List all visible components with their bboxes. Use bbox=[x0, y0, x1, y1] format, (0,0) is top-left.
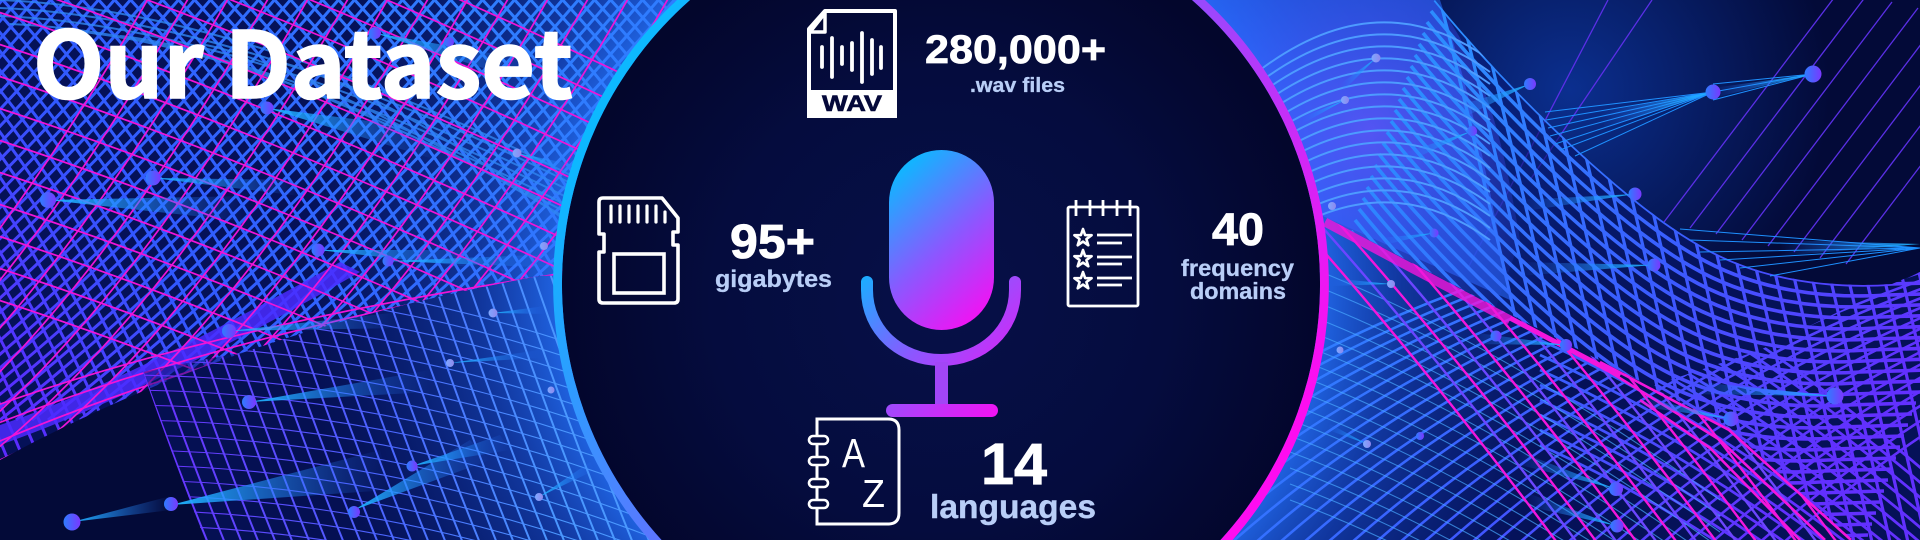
mesh: right side blue strands bbox=[1192, 0, 1920, 540]
stat: 14 languages: languages bbox=[930, 488, 1096, 525]
icon: A-Z address book: Z bbox=[862, 473, 885, 516]
stat: 40 frequency domains: domains bbox=[1190, 278, 1286, 304]
mesh: right pink band bbox=[1314, 216, 1852, 540]
spikes and nodes, left bbox=[40, 27, 595, 530]
stat: 14 languages bbox=[930, 432, 1096, 525]
stat: 95+ gigabytes: 95+ bbox=[730, 216, 815, 269]
stat: 280,000+ .wav files: 280,000+ bbox=[925, 28, 1106, 72]
stat: 280,000+ .wav files: .wav files bbox=[970, 75, 1065, 97]
stat: 95+ gigabytes bbox=[715, 216, 832, 293]
thin diagonal lines, top right bbox=[1468, 0, 1920, 268]
icon: SD card bbox=[599, 198, 678, 303]
stat: 280,000+ .wav files bbox=[925, 28, 1106, 97]
icon: microphone bbox=[867, 150, 1015, 417]
stat: 40 frequency domains bbox=[1181, 204, 1294, 304]
mesh: lower left strands bbox=[143, 276, 662, 540]
stat: 40 frequency domains: 40 bbox=[1212, 204, 1264, 255]
spikes and nodes, right bbox=[1300, 54, 1920, 532]
icon: WAV file bbox=[807, 11, 897, 118]
central circle panel bbox=[553, 0, 1329, 540]
icon: A-Z address book bbox=[809, 419, 899, 524]
icon: WAV file: WAV bbox=[822, 91, 882, 116]
stat: 14 languages: 14 bbox=[981, 432, 1047, 497]
stat: 95+ gigabytes: gigabytes bbox=[715, 266, 832, 293]
mesh: upper left blue and pink bbox=[0, 0, 690, 460]
stat: 40 frequency domains: frequency bbox=[1181, 255, 1294, 281]
icon: notepad checklist bbox=[1068, 200, 1138, 306]
icon: A-Z address book: A bbox=[842, 430, 866, 476]
